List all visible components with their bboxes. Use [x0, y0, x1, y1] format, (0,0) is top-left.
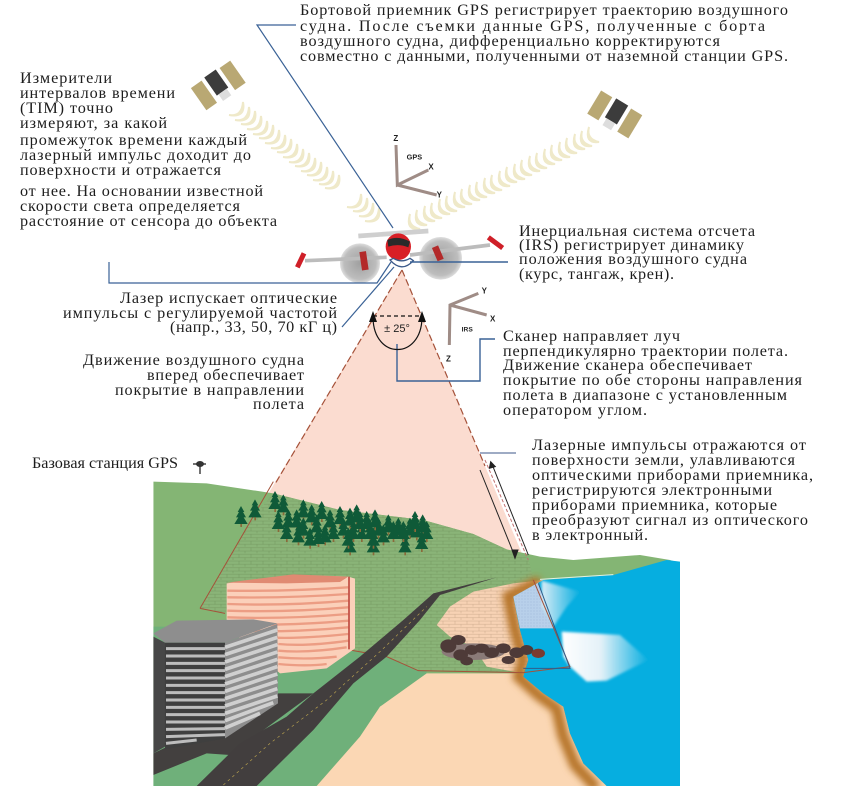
text: laser emits pulses [63, 289, 337, 336]
text: laser emits pulses: Лазер испускает оптические [120, 289, 337, 307]
text: scanner: Движение сканера обеспечивает [503, 356, 752, 374]
grey building [153, 619, 278, 753]
right satellite body [601, 98, 628, 131]
road marking [223, 607, 427, 785]
shallow water dots [516, 584, 552, 626]
upper beach mesh [437, 580, 543, 673]
angle label: ± 25° [384, 323, 410, 335]
text: scanner: перпендикулярно траектории полета. [503, 342, 788, 360]
footprint water edge [523, 583, 570, 668]
lower foam [562, 632, 648, 682]
text: scanner: покрытие по обе стороны направления [503, 371, 803, 389]
angle arc [373, 318, 422, 350]
axes labels: Y [437, 190, 443, 199]
front stripes [166, 649, 225, 743]
text: reflected pulses: оптическими приборами приемника, [532, 466, 813, 484]
IRS axes [446, 286, 496, 364]
wing tips [297, 237, 503, 267]
GPS signal left [229, 102, 379, 221]
upper foam [542, 581, 580, 627]
grey building right face [225, 624, 278, 738]
axes labels: Z [393, 134, 398, 143]
pink building corner [348, 576, 350, 650]
text: time interval meters: интервалов времени [20, 84, 175, 102]
text: reflected pulses: Лазерные импульсы отражаются от [532, 436, 806, 454]
text: inertial reference system: (IRS) регистрирует динамику [519, 236, 745, 254]
GPS base station icon [193, 461, 206, 474]
text: time interval meters: скорости света определяется [20, 197, 241, 215]
text: time interval meters: (TIM) точно [20, 99, 113, 117]
sand beach [317, 673, 607, 786]
pink building [227, 574, 355, 673]
text: onboard GPS receiver [300, 1, 788, 65]
text: time interval meters: от нее. На основании известной [20, 182, 263, 200]
text: time interval meters: лазерный импульс доходит до [20, 146, 251, 164]
engines [363, 247, 441, 270]
sea [513, 560, 680, 786]
text: time interval meters: Измерители [20, 69, 112, 87]
text: aircraft motion: покрытие в направлении [115, 381, 304, 399]
IRS axes labels: X [490, 315, 496, 324]
rocks [440, 635, 545, 665]
text: inertial reference system: (курс, тангаж, крен). [519, 265, 674, 283]
footprint mesh overlay [201, 494, 532, 672]
propeller discs [340, 237, 462, 283]
cockpit windows [387, 238, 410, 247]
satellite left [190, 60, 247, 112]
text: reflected pulses: поверхности земли, улавливаются [532, 451, 796, 469]
angle arrows [369, 311, 426, 322]
text: aircraft motion [83, 351, 304, 413]
lower green field [153, 627, 427, 786]
text: time interval meters: поверхности и отражается [20, 161, 222, 179]
IRS axes labels: Z [446, 355, 451, 364]
aircraft belly [390, 258, 413, 267]
text: aircraft motion: вперед обеспечивает [147, 366, 304, 384]
satellite panels [191, 61, 246, 110]
text: onboard GPS receiver: Бортовой приемник GPS регистрирует траекторию воздушного [300, 1, 788, 19]
grey building front face [165, 643, 225, 749]
laser beam cone [200, 270, 570, 667]
text: onboard GPS receiver: совместно с данными, полученными от наземной станции GPS. [300, 47, 788, 65]
text: reflected pulses [532, 436, 813, 544]
callout lines [109, 25, 516, 453]
upper beach [437, 580, 543, 673]
side stripes [225, 630, 277, 728]
text: aircraft motion: Движение воздушного судна [83, 351, 304, 369]
grey building roof [153, 619, 277, 643]
text: reflected pulses: в электронный. [532, 526, 648, 544]
text: scanner: оператором углом. [503, 401, 647, 419]
text: laser emits pulses: (напр., 33, 50, 70 кГ ц) [170, 318, 337, 336]
text: time interval meters [20, 69, 277, 230]
dark road surroundings [153, 693, 313, 775]
text: GPS base station: Базовая станция GPS [32, 454, 178, 472]
text: scanner [503, 327, 803, 419]
IRS axes labels: Y [482, 286, 488, 295]
satellite right [586, 90, 643, 140]
right satellite panels [587, 90, 642, 138]
text: inertial reference system [519, 222, 755, 283]
beam left edge [275, 270, 402, 484]
text: reflected pulses: регистрируются электронными [532, 481, 772, 499]
axes labels: X [428, 162, 434, 171]
shore foam line [540, 575, 613, 579]
aircraft [297, 231, 503, 283]
beam right edge [402, 270, 485, 466]
forest [234, 491, 433, 555]
IRS axes labels [446, 286, 496, 364]
pink building body [227, 575, 355, 673]
text: reflected pulses: преобразуют сигнал из оптического [532, 511, 808, 529]
angle dashed line [373, 315, 422, 317]
GPS signal right [409, 127, 599, 229]
text: time interval meters: промежуток времени каждый [20, 131, 247, 149]
IRS axes labels: IRS [462, 327, 473, 334]
text: scanner: полета в диапазоне с установленным [503, 386, 787, 404]
survey footprint base [273, 493, 508, 670]
text: laser emits pulses: импульсы с регулируемой частотой [63, 304, 337, 322]
text: time interval meters: расстояние от сенсора до объекта [20, 212, 277, 230]
axes lines [396, 145, 437, 195]
text: onboard GPS receiver: воздушного судна, дифференциально корректируются [300, 32, 721, 50]
satellite body [204, 70, 233, 102]
IRS axes lines [449, 293, 487, 345]
road [197, 577, 497, 786]
text: onboard GPS receiver: судна. После съемки данные GPS, полученные с борта [300, 17, 765, 35]
scan angle [369, 311, 426, 350]
wings [305, 245, 490, 261]
axes labels: GPS [407, 152, 422, 161]
axes labels [393, 134, 443, 199]
text: scanner: Сканер направляет луч [503, 327, 680, 345]
pink building stripes [227, 587, 348, 665]
shallow water [513, 583, 553, 628]
text: inertial reference system: Инерциальная система отсчета [519, 222, 755, 240]
text: reflected pulses: приборами приемника, которые [532, 496, 777, 514]
pink building roof [227, 574, 348, 583]
GPS axes [393, 134, 443, 199]
reflected pulse arrows [480, 460, 528, 560]
fuselage [386, 233, 411, 260]
text: aircraft motion: полета [253, 395, 304, 413]
text: time interval meters: измеряют, за какой [20, 114, 167, 132]
grey building left face [153, 637, 165, 753]
green hillside [153, 482, 680, 786]
shoreline shading [508, 581, 597, 788]
tail [358, 231, 428, 236]
footprint outline [200, 482, 570, 673]
text: inertial reference system: положения воздушного судна [519, 250, 747, 268]
illustrated terrain scene [153, 460, 680, 788]
